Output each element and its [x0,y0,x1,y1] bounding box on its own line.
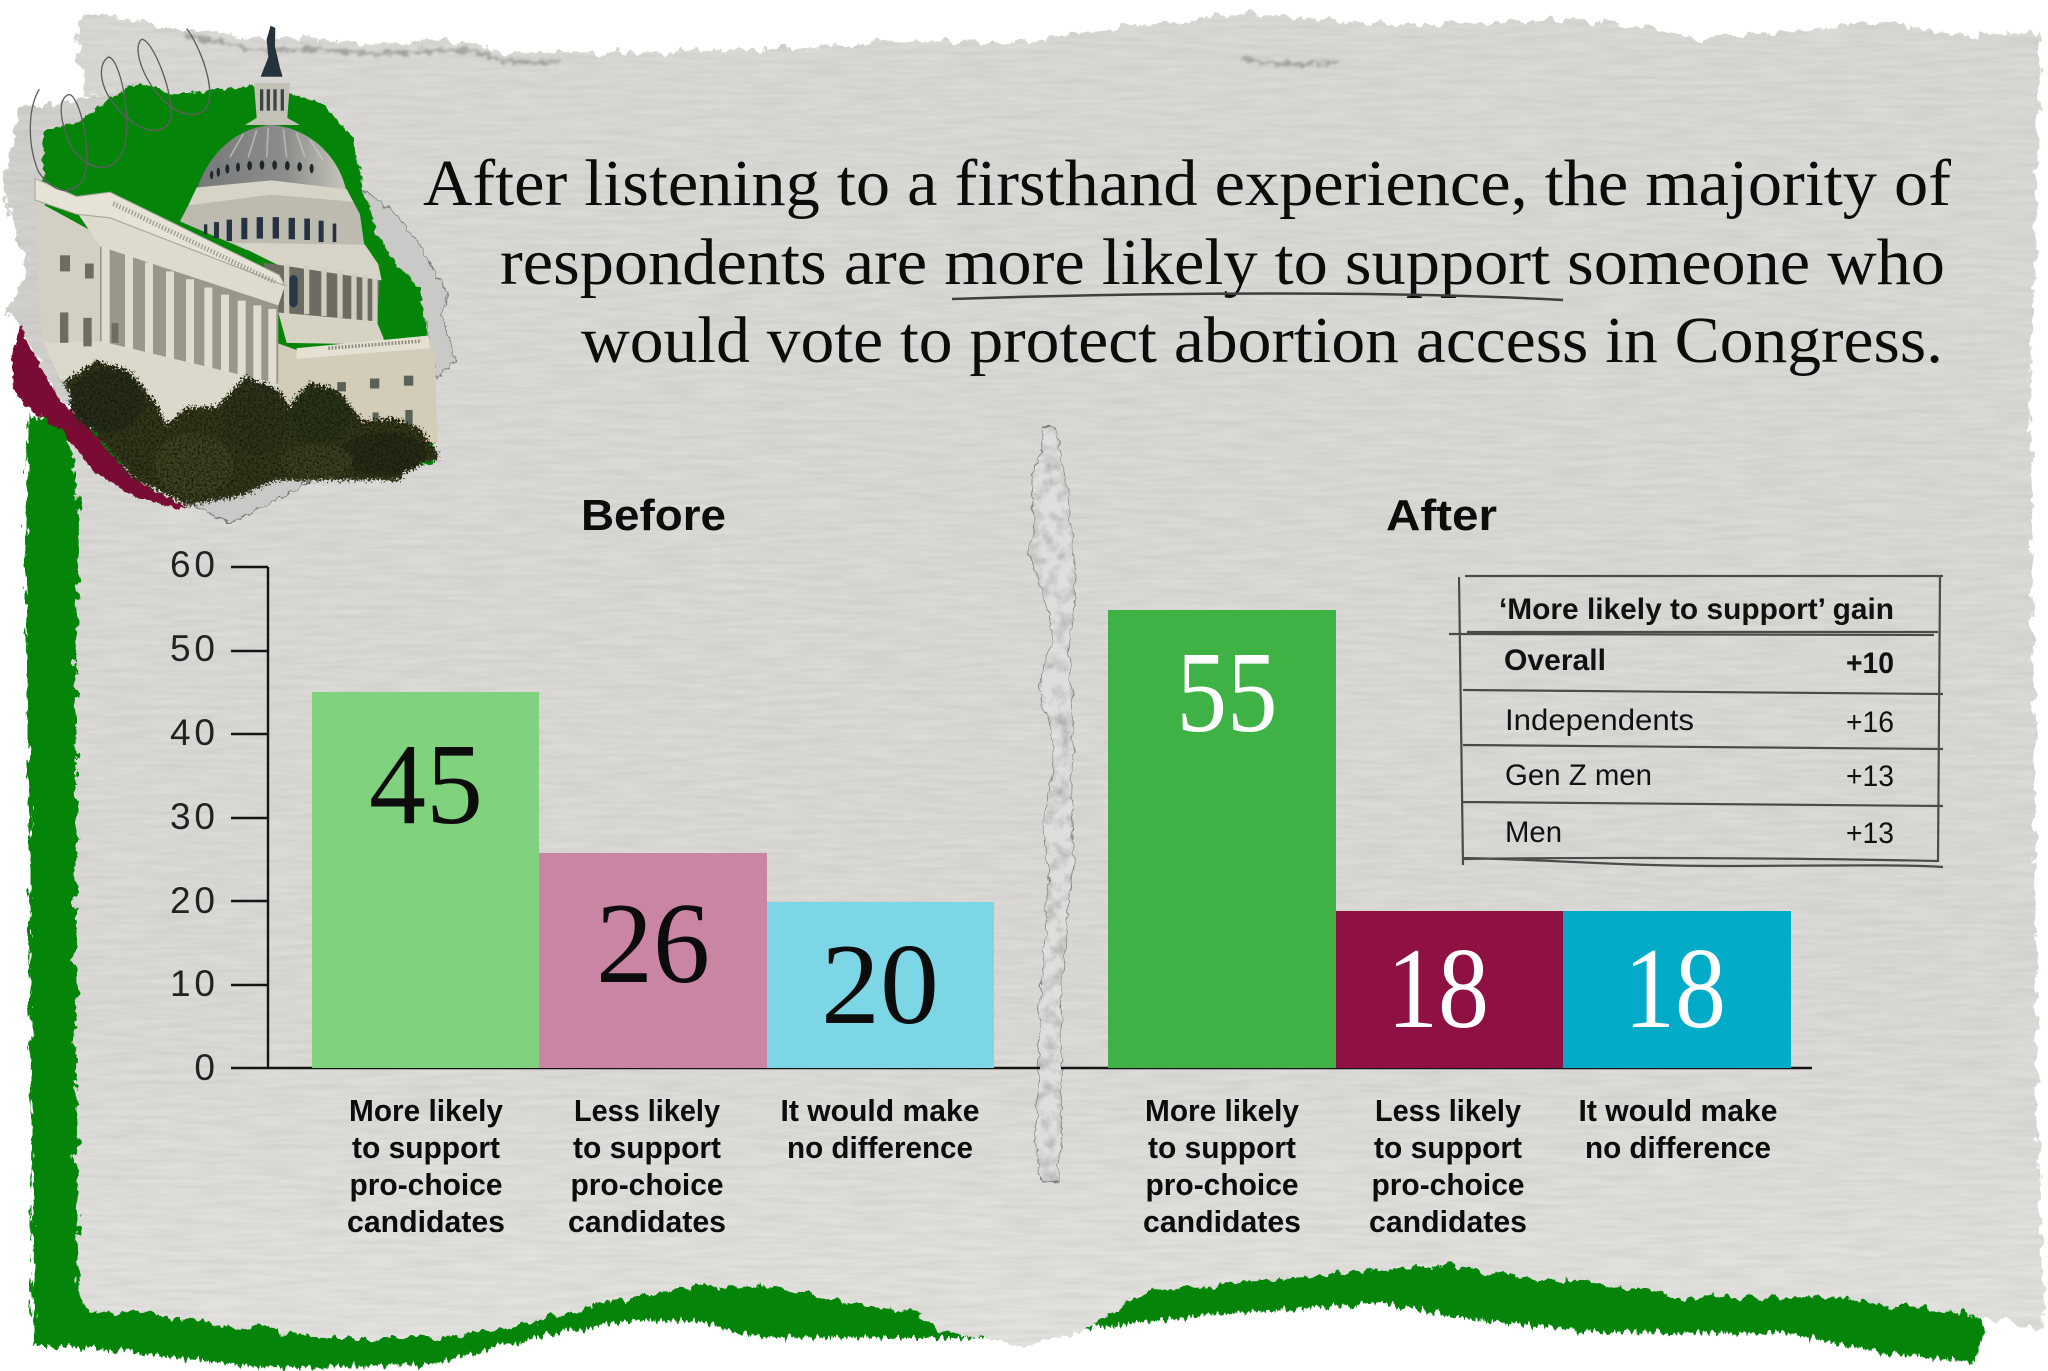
maroon torn strip [12,327,188,509]
label: more likely: candidates [1143,1204,1301,1239]
before heading: Before [581,491,726,540]
bar: no difference 18 [1563,911,1791,1068]
label: less likely: pro-choice [1372,1167,1524,1202]
row: overall: Overall [1504,644,1606,677]
y axis [170,544,1040,1088]
row: gen z men [1505,759,1894,793]
headline: would vote to protect abortion access in Congress. [581,304,1943,377]
label: more likely: pro-choice [1146,1167,1298,1202]
capitol dome [180,26,385,345]
label: less likely: candidates [568,1204,726,1239]
label: less likely: candidates [1369,1204,1527,1239]
label: more likely: More likely [349,1093,504,1128]
capitol collage photo [12,26,455,523]
row: independents: Independents [1505,704,1694,737]
bar: less likely 18 [1336,911,1563,1068]
capitol trees [63,361,438,505]
bar: more likely 55 [1108,610,1336,1068]
row: overall [1504,644,1894,680]
row: men: Men [1505,816,1562,849]
torn flap right [360,187,455,379]
x axis line [1061,1067,1812,1069]
headline [423,147,1951,377]
after chart [1061,491,1812,1239]
bar: no difference 18: 18 [1624,925,1726,1052]
headline: respondents are more likely to support someone who [500,226,1945,299]
hand-drawn underline [952,294,1563,300]
label: more likely: candidates [347,1204,505,1239]
row: overall: +10 [1846,647,1894,680]
y axis: 0 [194,1047,215,1088]
row: gen z men: +13 [1846,760,1894,793]
gain table [1449,576,1943,867]
torn flap bottom [190,479,313,523]
bar: no difference 20: 20 [821,921,939,1048]
bar: more likely 45 [312,692,539,1068]
row: men: +13 [1846,817,1894,850]
row: gen z men: Gen Z men [1505,759,1652,792]
green paper behind capitol [43,82,433,464]
label: less likely: Less likely [574,1093,721,1128]
before chart [170,491,1040,1239]
bar: more likely 55: 55 [1176,629,1278,756]
label: no difference: no difference [1585,1130,1771,1165]
label: more likely: to support [352,1130,500,1165]
headline: After listening to a firsthand experience, the majority of [423,147,1951,220]
label: no difference: no difference [787,1130,973,1165]
y axis: 10 [170,963,215,1004]
label: more likely: pro-choice [350,1167,502,1202]
bar: less likely 26: 26 [596,880,710,1007]
y axis: 30 [170,796,215,837]
after heading: After [1386,491,1497,540]
label: less likely: to support [1374,1130,1522,1165]
label: less likely: Less likely [1375,1093,1522,1128]
row: men [1505,816,1894,850]
label: no difference: It would make [780,1093,980,1128]
label: less likely: pro-choice [570,1167,724,1202]
y axis: 60 [170,544,215,585]
bar: less likely 18: 18 [1387,925,1489,1052]
bar: no difference 20 [767,902,994,1068]
left torn lobe of paper [2,82,200,429]
bar: more likely 45: 45 [369,721,483,848]
label: no difference: It would make [1578,1093,1778,1128]
row: independents [1505,704,1894,739]
decorative squiggle line [30,29,210,190]
label: more likely: to support [1148,1130,1296,1165]
capitol right wing [277,336,437,443]
capitol left wing with colonnade [35,179,285,429]
y axis: 40 [170,712,215,753]
y axis: 50 [170,628,215,669]
row: independents: +16 [1846,706,1894,739]
y axis: 20 [170,880,215,921]
label: less likely: to support [573,1130,721,1165]
green backing paper [25,418,1983,1368]
torn divider strip [1028,428,1075,1183]
bar: less likely 26 [539,853,767,1068]
label: more likely: More likely [1145,1093,1300,1128]
top edge torn shadow marks [185,36,1340,64]
table header: ‘More likely to support’ gain [1499,593,1894,626]
